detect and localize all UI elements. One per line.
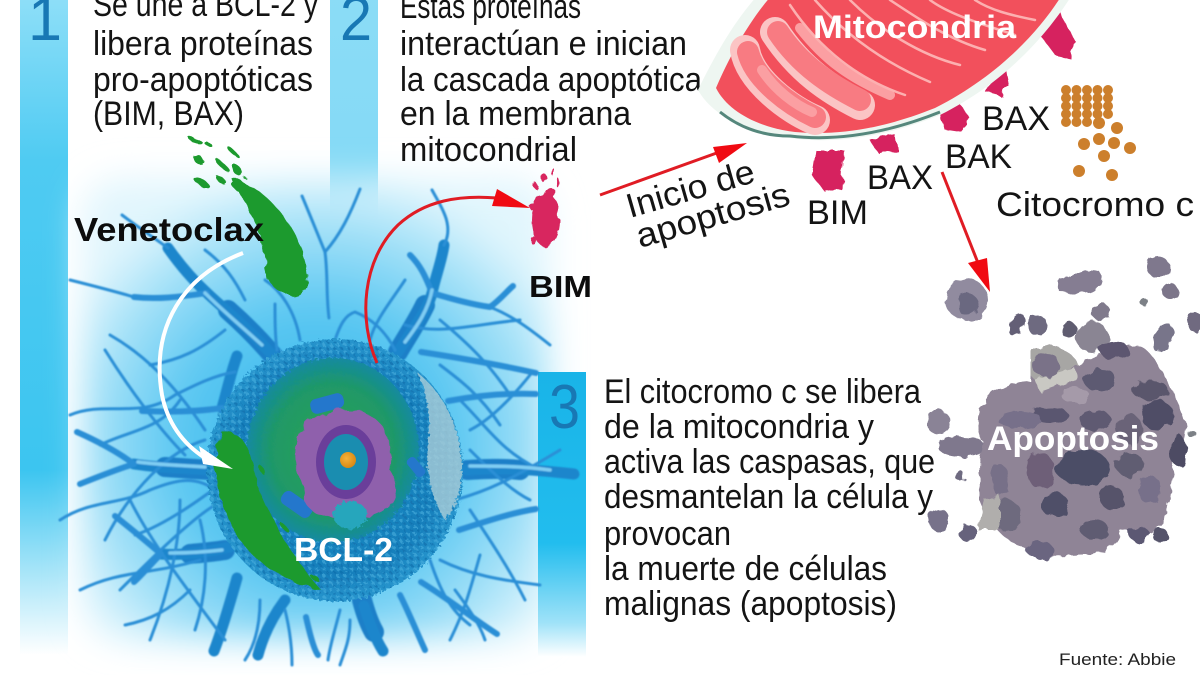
label: BAK: BAK (945, 138, 1012, 176)
text block: step 3 (604, 373, 935, 623)
arrow: mitochondrion to apoptosis (942, 172, 990, 292)
illustration: apoptotic cell (909, 256, 1200, 558)
ribosome cluster (333, 501, 367, 529)
text block: step 2: en la membrana (400, 95, 631, 133)
protein tufts on membrane (812, 12, 1076, 192)
cell membrane (207, 339, 463, 601)
mass highlights (978, 340, 1186, 558)
text block: step 3: desmantelan la célula y (604, 478, 933, 516)
nucleus and reticulum (295, 410, 397, 520)
panel: cell glow (82, 178, 550, 640)
arrow: BCL-2 to BIM (366, 189, 530, 363)
label: Inicio de apoptosis: Inicio de (622, 153, 759, 226)
organelle: mitochondria blue 1 (309, 392, 345, 415)
organelle: mitochondria blue 3 (405, 455, 427, 479)
label: BIM bold: BIM (529, 269, 592, 304)
cell dendrites (60, 189, 574, 665)
text block: step 2: mitocondrial (400, 131, 577, 169)
label: Citocromo c: Citocromo c (996, 186, 1194, 224)
arrow: venetoclax to BCL-2 (160, 253, 243, 469)
panel: bar 2 (330, 0, 378, 315)
source: Fuente: Abbie (1059, 650, 1176, 669)
icon: cytochrome c molecules (1066, 90, 1136, 181)
label: Mitocondria: Mitocondria (813, 9, 1016, 45)
label: Inicio de apoptosis (622, 153, 794, 256)
shell rim (720, 112, 940, 138)
mitochondrion outer shell (698, 0, 1072, 140)
BCL-2 green patch (216, 432, 321, 590)
text block: step 1: (BIM, BAX) (93, 95, 244, 133)
label: BIM: BIM (807, 194, 868, 232)
cytoplasm (247, 358, 419, 542)
text block: step 2: interactúan e inician (400, 25, 687, 63)
text block: step 3: la muerte de células (604, 550, 887, 588)
text block: step 3: de la mitocondria y (604, 408, 874, 446)
panel: bar 3 (538, 372, 586, 657)
text block: step 1: pro-apoptóticas (93, 61, 313, 99)
illustration: mitochondrion (698, 0, 1076, 192)
BCL-2 label: BCL-2 (294, 531, 393, 568)
label: Inicio de apoptosis: apoptosis (632, 176, 794, 256)
main mass (978, 345, 1186, 556)
arrow: inicio de apoptosis (600, 143, 747, 195)
mitochondrion inner (716, 0, 1062, 133)
text block: step 2: la cascada apoptótica (400, 61, 702, 99)
organelle: mitochondria blue 2 (278, 489, 315, 520)
icon: BIM cluster (529, 167, 560, 247)
illustration: cancer cell (60, 189, 574, 665)
text block: step 1: libera proteínas (93, 25, 313, 63)
label: Venetoclax: Venetoclax (74, 211, 265, 248)
step number 3: 3 (549, 373, 580, 442)
text block: step 3: activa las caspasas, que (604, 443, 935, 481)
cristae folds (745, 0, 1035, 120)
pale vesicle side (418, 373, 462, 520)
text block: step 1 (93, 0, 318, 133)
fragments (909, 256, 1200, 542)
text block: step 3: El citocromo c se libera (604, 373, 921, 411)
text block: step 3: malignas (apoptosis) (604, 585, 897, 623)
label: BAX upper: BAX (982, 100, 1050, 138)
text block: step 3: provocan (604, 515, 731, 553)
label: Apoptosis: Apoptosis (987, 420, 1159, 458)
label: BAX lower: BAX (867, 159, 933, 197)
text block: step 2 (400, 0, 702, 169)
panel: bar 1 (20, 0, 68, 655)
icon: venetoclax molecule (189, 136, 308, 296)
